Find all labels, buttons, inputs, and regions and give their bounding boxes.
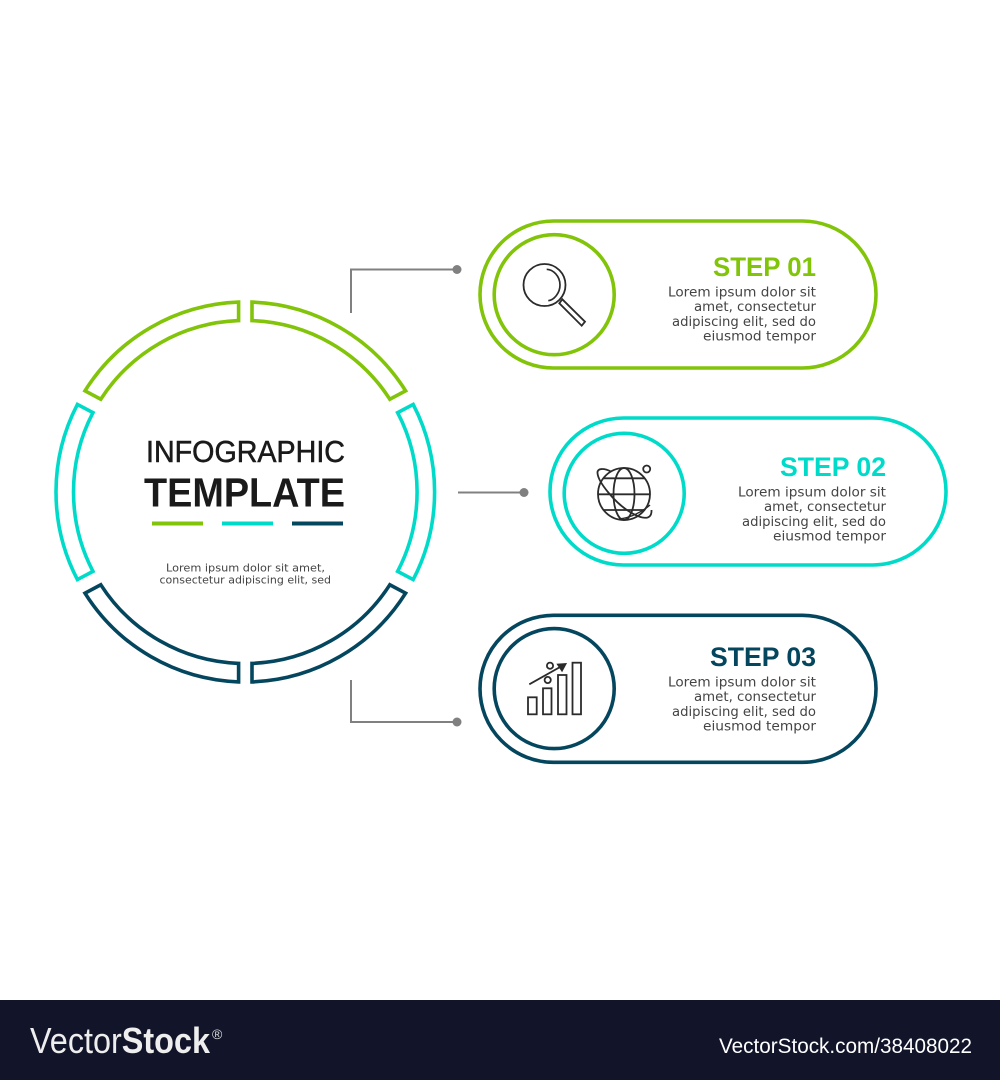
step 01 text: amet, consectetur (694, 300, 817, 315)
step 02 text (738, 486, 887, 544)
step 01 pill outline (480, 221, 876, 368)
ring segment: green top left (85, 302, 239, 399)
panel: step 03 (480, 615, 876, 762)
footer logo: VectorStock (30, 1020, 211, 1061)
step 02 text: eiusmod tempor (773, 529, 887, 544)
ring segment: green top right (252, 302, 406, 399)
step 03 text: amet, consectetur (694, 690, 817, 705)
step 02 icon ring (564, 433, 684, 553)
center description text: Lorem ipsum dolor sit amet, (166, 562, 325, 574)
center description text (160, 562, 331, 586)
title (144, 435, 345, 516)
ring segment: cyan left (56, 404, 93, 580)
step 01 text: Lorem ipsum dolor sit (668, 286, 816, 301)
step 02 text: adipiscing elit, sed do (742, 515, 886, 530)
step 01 text (668, 286, 817, 344)
panel: segmented ring (56, 302, 435, 682)
title accent bars (152, 522, 343, 526)
panel: step 01 (480, 221, 876, 368)
connector: step 01 (351, 265, 462, 313)
icon: rising bar chart (528, 663, 581, 714)
step 03 icon ring (494, 629, 614, 749)
step 03 text: Lorem ipsum dolor sit (668, 676, 816, 691)
step 03 text: adipiscing elit, sed do (672, 705, 816, 720)
step 02 text: amet, consectetur (764, 500, 887, 515)
step 01 heading: STEP 01 (713, 252, 816, 282)
center description text: consectetur adipiscing elit, sed (160, 574, 331, 586)
footer band (0, 1000, 1000, 1080)
icon: globe with orbit (597, 466, 652, 520)
title: INFOGRAPHIC (146, 435, 345, 469)
step 01 text: eiusmod tempor (703, 329, 817, 344)
step 03 pill outline (480, 615, 876, 762)
connector: step 02 (458, 488, 528, 497)
connector: step 03 (351, 680, 462, 726)
footer url: VectorStock.com/38408022 (719, 1035, 972, 1058)
title: TEMPLATE (144, 470, 345, 516)
step 03 text: eiusmod tempor (703, 719, 817, 734)
ring segment: cyan right (398, 404, 435, 580)
panel: step 02 (550, 418, 946, 565)
step 03 text (668, 676, 817, 734)
step 03 heading: STEP 03 (710, 642, 816, 672)
step 02 pill outline (550, 418, 946, 565)
ring segment: navy bottom left (85, 585, 239, 682)
step 02 text: Lorem ipsum dolor sit (738, 486, 886, 501)
footer registered mark: ® (212, 1026, 223, 1042)
step 01 icon ring (494, 235, 614, 355)
ring segment: navy bottom right (252, 585, 406, 682)
step 01 text: adipiscing elit, sed do (672, 315, 816, 330)
step 02 heading: STEP 02 (780, 452, 886, 482)
icon: magnifying glass (524, 264, 585, 326)
